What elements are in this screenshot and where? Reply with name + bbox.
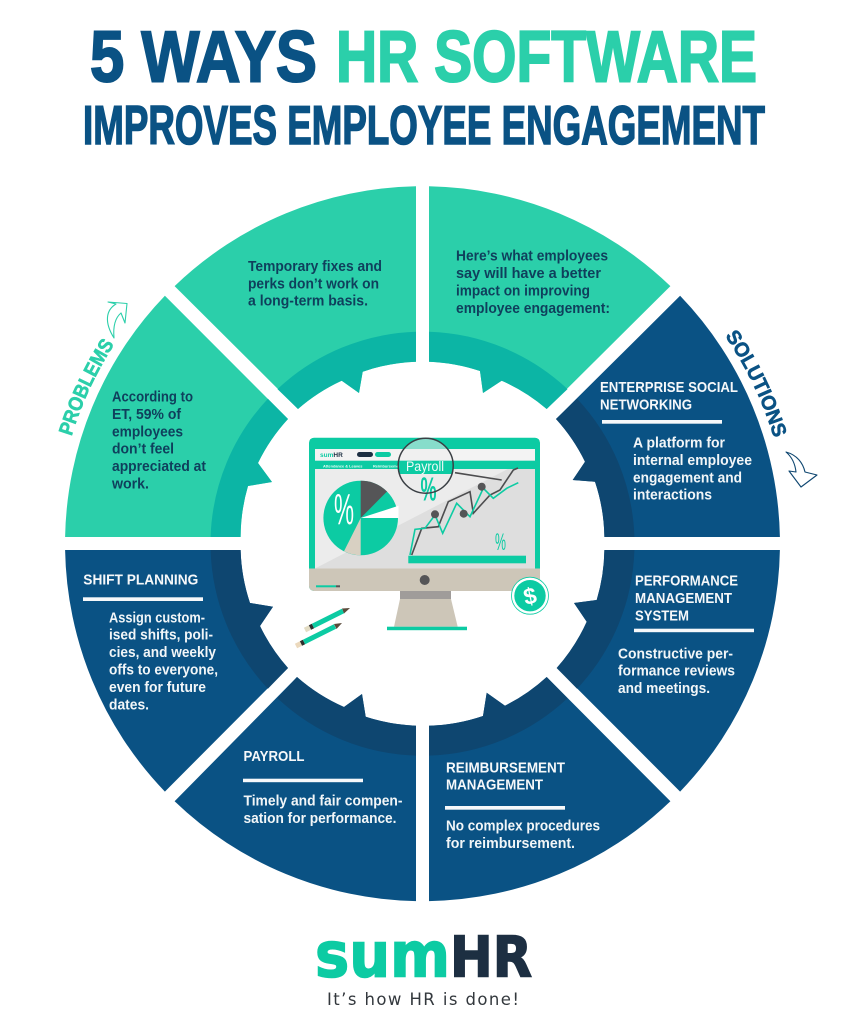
panel: reimbursement management [429, 677, 670, 901]
power button [420, 575, 430, 585]
heading: performance management system [635, 574, 738, 625]
heading: performance management system: MANAGEMENT [635, 591, 732, 607]
text: employees say [456, 249, 610, 317]
text: 59 percent statistic: employees [112, 424, 183, 440]
screen [315, 449, 535, 568]
icon: dollar coin [512, 577, 548, 614]
text: reimbursement description [446, 819, 600, 852]
percent sign: % [495, 529, 506, 556]
panel: problem, top right [429, 186, 670, 409]
text: performance description: formance reviews [618, 664, 735, 680]
text: payroll description [244, 794, 403, 827]
text: platform description: interactions [633, 488, 712, 504]
panel: shift planning [65, 550, 288, 792]
text: shift planning description: Assign custom- [109, 610, 205, 626]
text: temporary fixes: perks don’t work on [248, 277, 379, 293]
text: reimbursement description: No complex procedures [446, 819, 600, 835]
text: shift planning description: even for future [109, 680, 206, 696]
panel: enterprise social networking [556, 296, 780, 537]
panel: problem, top left [175, 186, 416, 409]
text: platform description [633, 435, 752, 504]
logo: sumHR: sum [315, 919, 450, 992]
label: solutions: SOLUTIONS [726, 330, 786, 437]
stand [400, 591, 451, 599]
line chart [410, 468, 518, 555]
text: 59 percent statistic: appreciated at [112, 459, 206, 475]
heading: performance management system: PERFORMANCE [635, 574, 738, 590]
illustration: computer monitor [309, 438, 540, 630]
text: temporary fixes: a long-term basis. [248, 294, 368, 310]
tagline: It’s how HR is done! [327, 990, 519, 1009]
text: platform description: engagement and [633, 470, 742, 486]
logo: sumHR: HR [450, 926, 532, 991]
pencil 2 [296, 623, 342, 646]
text: 59 percent statistic [111, 390, 206, 492]
illustration: computer monitor: Reimbursement [373, 463, 403, 468]
text: employees say: impact on improving [456, 284, 590, 300]
text: shift planning description [109, 610, 218, 714]
text: 59 percent statistic: work. [111, 476, 149, 492]
heading: enterprise social networking: ENTERPRISE SOCIAL [600, 380, 738, 396]
arrow: solutions [786, 452, 817, 487]
text: temporary fixes [248, 259, 382, 310]
pencil 1 [305, 608, 350, 630]
title line 1 [90, 18, 757, 98]
text: performance description: and meetings. [618, 681, 710, 697]
magnifier: payroll [398, 438, 453, 508]
icon: pencils [296, 608, 350, 646]
text: shift planning description: cies, and weekly [109, 645, 217, 661]
text: shift planning description: dates. [109, 698, 149, 714]
tiny nav labels: Attendance & Leaves [323, 463, 362, 468]
text: payroll description: sation for performance. [244, 811, 396, 827]
heading: enterprise social networking: NETWORKING [600, 397, 692, 413]
arrow: problems [107, 302, 127, 338]
heading: payroll: PAYROLL [244, 749, 304, 765]
tiny logo: sumHR [320, 452, 343, 459]
chart baseline bar [408, 556, 526, 563]
text: temporary fixes: Temporary fixes and [248, 259, 382, 275]
text: employees say: say will have a better [456, 266, 601, 282]
heading: enterprise social networking [600, 380, 738, 413]
text: 59 percent statistic: ET, 59% of [112, 407, 181, 423]
text: platform description: internal employee [633, 453, 752, 469]
text: employees say: employee engagement: [456, 301, 610, 317]
panel: problem, left [65, 296, 288, 537]
heading: performance management system: SYSTEM [635, 609, 689, 625]
text: reimbursement description: for reimbursement. [446, 836, 575, 852]
heading: reimbursement management: MANAGEMENT [446, 778, 543, 794]
monitor frame [309, 438, 540, 591]
heading: reimbursement management [446, 760, 565, 794]
chin indicator [316, 585, 336, 587]
pie chart: % [334, 485, 354, 534]
magnifier: payroll: Payroll [406, 459, 444, 474]
text: shift planning description: ised shifts, poli- [109, 628, 213, 644]
title [83, 18, 765, 156]
app header [315, 449, 535, 461]
heading: reimbursement management: REIMBURSEMENT [446, 760, 565, 776]
title line 1: 5 WAYS [90, 18, 317, 98]
panel: payroll [175, 677, 416, 901]
magnifier: payroll: % [420, 470, 436, 508]
text: payroll description: Timely and fair compen- [244, 794, 403, 810]
text: 59 percent statistic: don’t feel [112, 442, 174, 458]
pie chart [323, 481, 398, 555]
panel: performance management system [557, 550, 780, 792]
heading: shift planning: SHIFT PLANNING [83, 572, 198, 588]
text: employees say: Here’s what employees [456, 249, 608, 265]
text: platform description: A platform for [633, 435, 725, 451]
text: performance description [618, 646, 735, 697]
icon: dollar coin: $ [521, 582, 539, 610]
text: 59 percent statistic: According to [112, 390, 193, 406]
text: performance description: Constructive per- [618, 646, 733, 662]
label: problems: PROBLEMS [58, 338, 113, 436]
monitor chin [309, 568, 540, 591]
text: shift planning description: offs to everyone, [109, 662, 218, 678]
logo: sumHR [315, 919, 532, 992]
